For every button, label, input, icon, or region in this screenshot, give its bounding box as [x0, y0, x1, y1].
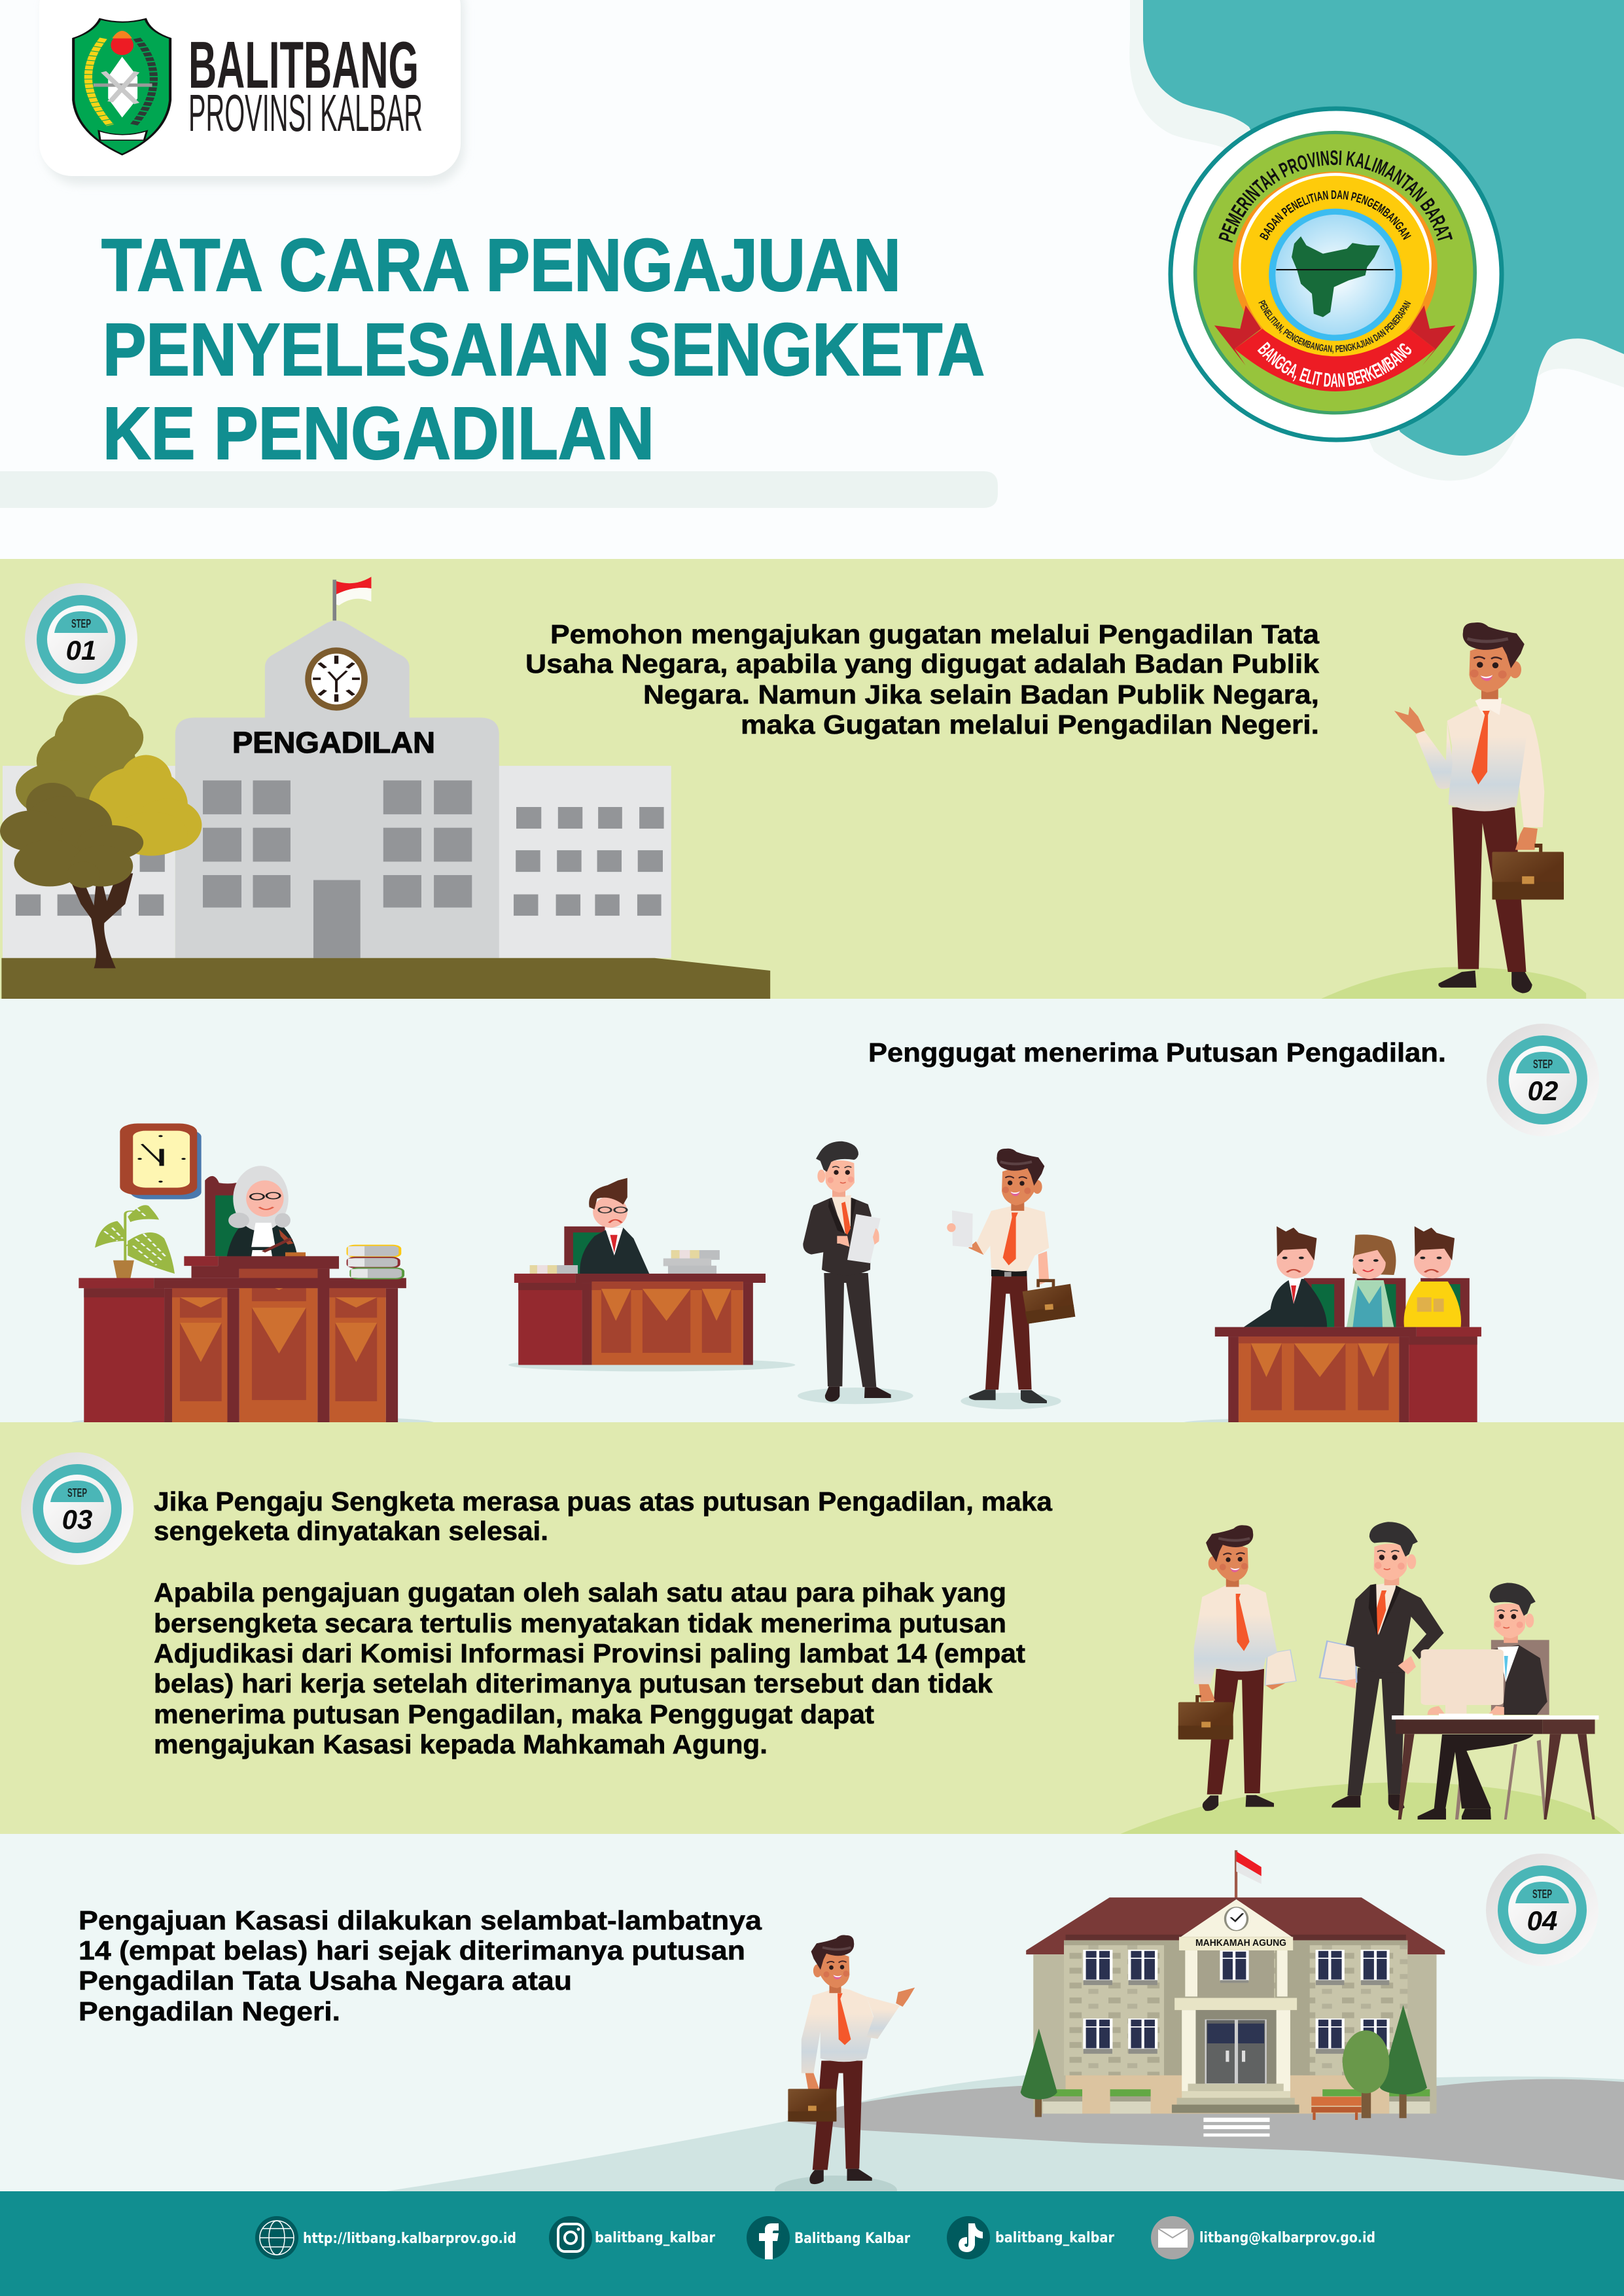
step 2 text: Penggugat menerima Putusan Pengadilan.	[868, 1037, 1446, 1067]
figure: seated man and desk	[1392, 1640, 1599, 1820]
step 3 text: Adjudikasi dari Komisi Informasi Provinsi paling lambat 14 (empat	[154, 1638, 1025, 1668]
step 3 text: belas) hari kerja setelah diterimanya putusan tersebut dan tidak	[154, 1668, 993, 1698]
step 3 text: menerima putusan Pengadilan, maka Penggugat dapat	[154, 1699, 874, 1729]
title	[101, 224, 985, 475]
emblem	[1169, 106, 1504, 442]
building sign: PENGADILAN	[232, 726, 435, 759]
step badge 02: 02	[1528, 1075, 1558, 1106]
step 1 text	[525, 619, 1320, 740]
title: PENYELESAIAN SENGKETA	[103, 308, 985, 391]
step 3 text	[154, 1486, 1053, 1759]
emblem: PEMERINTAH PROVINSI KALIMANTAN BARAT	[1218, 151, 1453, 243]
contact: tiktok: balitbang_kalbar	[995, 2230, 1114, 2246]
contact: email	[1151, 2216, 1375, 2259]
wing buildings	[3, 766, 671, 958]
main court building	[175, 620, 499, 958]
decorative blob: pale	[1129, 0, 1624, 480]
illustration: three people at desk	[1183, 1227, 1481, 1428]
figure: shirt man	[1178, 1585, 1296, 1811]
supreme court sign: MAHKAMAH AGUNG	[1195, 1937, 1286, 1948]
step 1 text: maka Gugatan melalui Pengadilan Negeri.	[741, 709, 1319, 740]
roof	[1026, 1897, 1445, 1954]
step 1 text: Negara. Namun Jika selain Badan Publik Negara,	[643, 679, 1319, 709]
trees	[1021, 2005, 1427, 2118]
facade	[1033, 1935, 1437, 2113]
step 3 text: Jika Pengaju Sengketa merasa puas atas putusan Pengadilan, maka	[154, 1486, 1053, 1516]
tree: yellow	[88, 755, 202, 856]
emblem: PENELITIAN, PENGEMBANGAN, PENGKAJIAN DAN PENERAPAN	[1258, 300, 1411, 353]
header section	[0, 0, 1624, 508]
step badge 01: 01	[66, 635, 96, 666]
flag	[1235, 1850, 1262, 1899]
planters	[1043, 2089, 1430, 2113]
step badge 03: STEP	[67, 1486, 87, 1499]
step 3 text: bersengketa secara tertulis menyatakan tidak menerima putusan	[154, 1608, 1006, 1638]
contact: facebook	[747, 2216, 910, 2259]
person 3	[1404, 1227, 1461, 1327]
title underline bar	[0, 471, 998, 508]
step badge 04: 04	[1527, 1905, 1557, 1936]
step badge 01: STEP	[71, 617, 91, 630]
panel: step 4	[0, 1834, 1624, 2205]
logo card: PROVINSI KALBAR	[188, 84, 423, 142]
icon: tower clock	[305, 647, 368, 711]
panel: step 2	[0, 999, 1624, 1431]
illustration: three office workers	[1120, 1522, 1621, 1834]
road	[786, 2079, 1624, 2180]
icon: Kalbar shield	[73, 19, 170, 154]
step 4 text: Pengadilan Negeri.	[79, 1996, 340, 2026]
step 4 text: Pengajuan Kasasi dilakukan selambat-lambatnya	[79, 1905, 762, 1935]
zebra crossing	[1203, 2118, 1269, 2136]
judge chair	[205, 1176, 245, 1256]
emblem: BADAN PENELITIAN DAN PENGEMBANGAN	[1259, 190, 1411, 241]
bench	[1311, 2097, 1362, 2120]
icon: potted plant	[95, 1205, 175, 1278]
pale hill	[386, 2066, 1624, 2191]
step 3 text: Apabila pengajuan gugatan oleh salah satu atau para pihak yang	[154, 1577, 1006, 1607]
portico	[1172, 1899, 1299, 2113]
figure: man in suit with paper	[798, 1141, 913, 1404]
contact: facebook: Balitbang Kalbar	[794, 2231, 910, 2247]
title: TATA CARA PENGAJUAN	[101, 224, 901, 306]
step badge 01	[25, 583, 137, 696]
step badge 04: STEP	[1532, 1888, 1552, 1901]
step badge 03: 03	[62, 1504, 92, 1535]
judge bench	[79, 1256, 406, 1423]
icon: flag	[332, 577, 371, 620]
step 4 text: Pengadilan Tata Usaha Negara atau	[79, 1965, 572, 1996]
contact: instagram: balitbang_kalbar	[595, 2230, 715, 2246]
panel: step 3	[0, 1422, 1624, 1834]
contact: email: litbang@kalbarprov.go.id	[1199, 2230, 1375, 2246]
logo card	[39, 0, 465, 185]
contact: tiktok	[947, 2216, 1114, 2259]
step 1 text: Usaha Negara, apabila yang digugat adalah Badan Publik	[525, 649, 1319, 679]
figure: man with briefcase	[1321, 622, 1586, 999]
panel: step 1	[0, 559, 1624, 999]
contact: website	[255, 2216, 516, 2259]
step badge 04	[1486, 1854, 1598, 1966]
step 4 text: 14 (empat belas) hari sejak diterimanya putusan	[79, 1935, 745, 1965]
figure: man with briefcase and paper	[947, 1149, 1075, 1409]
desk	[1215, 1327, 1481, 1423]
step 3 text: sengeketa dinyatakan selesai.	[154, 1516, 548, 1546]
brand name: BALITBANG	[188, 29, 419, 102]
illustration: Mahkamah Agung building	[1021, 1850, 1445, 2136]
tree: back	[16, 695, 143, 819]
figure: pointing man	[775, 1935, 915, 2205]
step badge 02	[1487, 1024, 1599, 1136]
tree: front	[0, 783, 143, 968]
illustration: judge at bench	[70, 1124, 435, 1431]
step 4 text	[79, 1905, 762, 2026]
step 1 text: Pemohon mengajukan gugatan melalui Pengadilan Tata	[550, 619, 1320, 649]
icon: wall clock	[120, 1124, 202, 1199]
illustration: clerk at desk	[508, 1178, 795, 1371]
step badge 02: STEP	[1533, 1058, 1553, 1071]
illustration: court building and trees	[0, 577, 770, 999]
contact: website: http://litbang.kalbarprov.go.id	[303, 2231, 516, 2247]
icon: book stack	[348, 1246, 403, 1279]
ground	[1, 958, 770, 999]
step 3 text: mengajukan Kasasi kepada Mahkamah Agung.	[154, 1729, 768, 1759]
emblem: BANGGA, ELIT DAN BERKEMBANG	[1258, 342, 1411, 387]
figure: judge	[227, 1166, 306, 1257]
person 2	[1347, 1234, 1396, 1327]
figure: suit man	[1320, 1582, 1443, 1810]
brand name	[188, 29, 423, 142]
decorative blob: teal	[1143, 0, 1624, 456]
person 1	[1244, 1227, 1327, 1327]
contact: instagram	[549, 2216, 715, 2259]
windows	[1084, 1950, 1389, 2054]
footer	[0, 2191, 1624, 2296]
title: KE PENGADILAN	[103, 392, 654, 475]
step badge 03	[21, 1452, 133, 1565]
